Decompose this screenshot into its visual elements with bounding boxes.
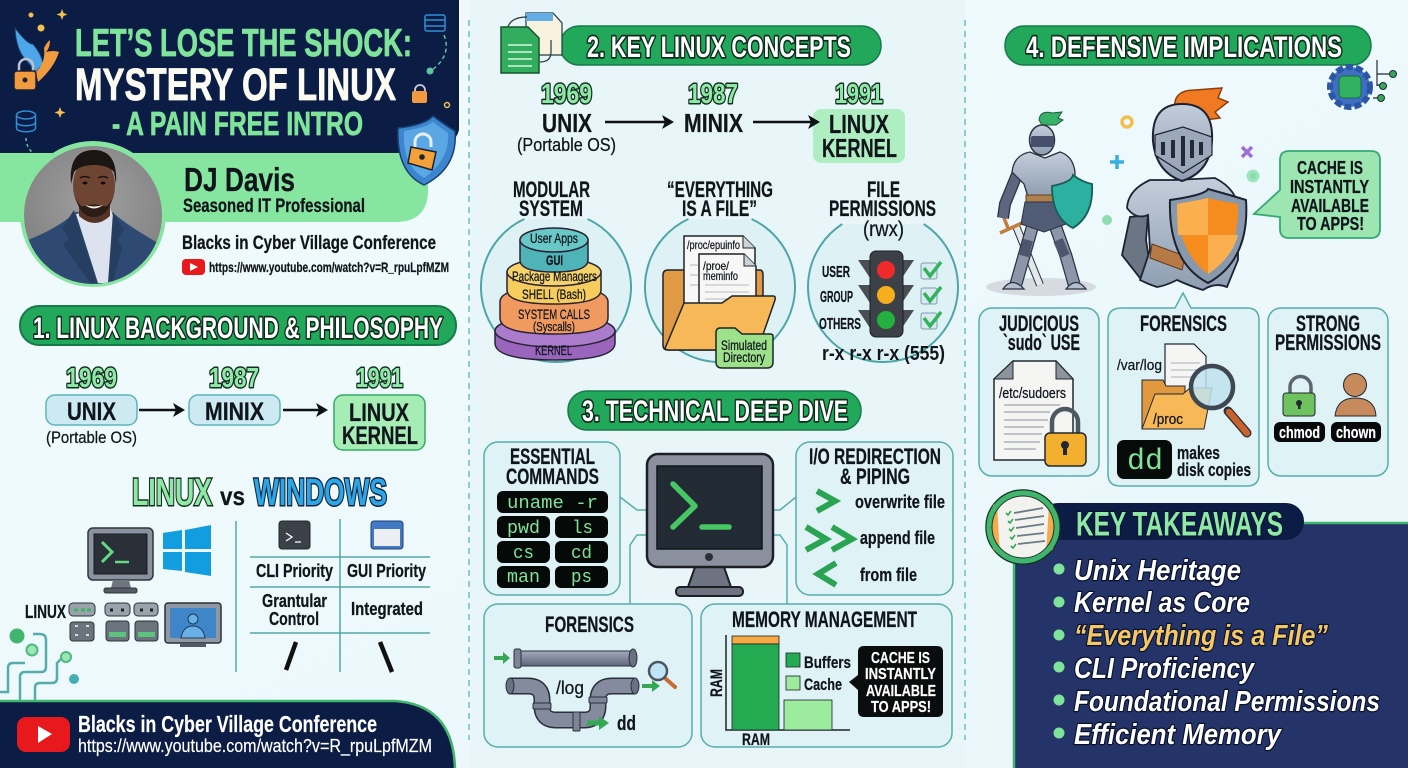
conference text and link: https://www.youtube.com/watch?v=R_rpuLpfMZM [209,259,449,275]
speaker name and role: DJ Davis [184,161,295,198]
panel: io redirection: append file [860,528,935,548]
section 2 heading [560,26,881,65]
footer banner [0,701,455,768]
stack labels: KERNEL [535,342,572,358]
concept: file permissions [808,177,958,365]
concept: file permissions: r-x r-x r-x (555) [822,343,945,365]
takeaway list [1054,555,1380,751]
stack labels: GUI [546,252,563,268]
big knight shield [1170,189,1246,283]
decorative shapes around knight [1102,117,1258,225]
timeline: section 1 [46,362,425,450]
panel: forensics [1108,293,1259,486]
concept: modular system: MODULAR [513,177,590,202]
section 3 heading: 3. TECHNICAL DEEP DIVE [582,395,848,428]
stack labels: User Apps [530,230,578,246]
callout: cache speech bubble: INSTANTLY [1290,177,1369,197]
timeline: section 1: KERNEL [342,422,418,450]
section 1 heading [20,306,456,345]
linux vs windows heading [132,472,387,514]
timeline: section 1: LINUX [349,399,409,427]
timeline: section 1: (Portable OS) [46,428,137,447]
concept: file permissions: OTHERS [819,316,861,333]
icon: documents [501,13,562,73]
concept: file permissions: FILE [867,177,900,202]
title [75,22,412,142]
panel: forensics: FORENSICS [1140,311,1227,336]
callout: cache speech bubble [1254,151,1380,238]
icon: magnifier [649,662,675,687]
icon: checklist badge [986,490,1060,564]
section 1 heading: 1. LINUX BACKGROUND & PHILOSOPHY [33,312,443,345]
icon: magnifier [1191,366,1247,433]
panel: essential commands: uname -r [507,494,598,514]
timeline: section 2: KERNEL [822,133,897,163]
concept: everything is a file: “EVERYTHING [667,177,773,202]
chart legend [786,653,851,694]
timeline: section 2 [517,78,905,163]
stack labels: Package Managers [512,268,597,284]
icon: flame and padlock [14,9,68,118]
panel: key takeaways [986,490,1408,768]
linux vs windows heading: vs [220,481,245,511]
panel: essential commands: COMMANDS [506,464,599,489]
icon: gui desktop user [165,603,221,647]
panel: essential commands: ps [571,568,592,588]
panel: judicious sudo use: `sudo` USE [1003,330,1080,355]
concept: file permissions: PERMISSIONS [829,196,936,221]
concept: everything is a file: meminfo [703,269,738,283]
panel: strong permissions: chown [1336,423,1376,442]
bar chart: ram [707,635,850,749]
takeaway list: Kernel as Core [1074,587,1250,619]
icon: yellow padlock [1045,409,1086,466]
timeline: section 1: 1991 [356,362,403,393]
callout: cache [849,646,943,717]
panel: forensics: /var/log [1117,357,1162,374]
title: MYSTERY OF LINUX [75,59,396,110]
icon: gear network [1330,60,1396,107]
panel: essential commands: pwd [507,519,540,539]
footer banner: Blacks in Cyber Village Conference [78,711,377,737]
comparison table [236,519,430,672]
concept: everything is a file: Directory [723,349,765,365]
callout: cache: AVAILABLE [866,683,936,700]
timeline: section 1: 1969 [66,362,117,393]
sword [1000,208,1040,285]
panel: strong permissions: chmod [1279,423,1320,442]
panel: forensics: dd [1127,445,1163,479]
speaker band [0,153,428,222]
stack labels [512,230,597,358]
panel: essential commands: man [507,568,540,588]
panel: essential commands: ESSENTIAL [510,444,595,469]
icon: server and circuit [412,15,450,108]
icon: gui window [371,521,403,549]
panel: essential commands: ls [572,519,593,539]
concept: file permissions: GROUP [820,289,853,306]
panel: io redirection: I/O REDIRECTION [809,444,941,469]
comparison table: GUI Priority [347,561,426,581]
panel: essential commands: cd [571,544,592,564]
callout: cache speech bubble: CACHE IS [1297,158,1363,178]
bar chart: ram: RAM [742,730,770,749]
title: LET’S LOSE THE SHOCK: [75,22,412,65]
concept: file permissions: (rwx) [863,218,904,241]
panel: forensics: makes [1177,443,1220,463]
timeline: section 1: 1987 [209,362,259,393]
callout: cache speech bubble: TO APPS! [1297,214,1364,234]
footer banner: https://www.youtube.com/watch?v=R_rpuLpfMZM [78,736,432,757]
timeline: section 2: UNIX [542,108,593,138]
illustration: small knight [986,112,1096,296]
callout: cache: TO APPS! [871,699,931,716]
knight shield [1052,175,1092,228]
comparison table: Integrated [351,599,423,619]
linux hardware icons: LINUX [25,602,66,622]
callout: cache speech bubble: AVAILABLE [1291,196,1369,216]
panel: io redirection: & PIPING [840,464,910,489]
bar chart: ram: RAM [707,669,726,697]
icon: traffic light [858,251,914,337]
icon: person [1335,374,1376,416]
linux vs windows heading: WINDOWS [254,472,387,514]
concept: everything is a file: IS A FILE” [682,196,757,221]
stack labels: (Syscalls) [533,319,575,334]
concept: modular system: SYSTEM [519,196,583,221]
panel: forensics pipes: /log [556,678,584,698]
icon: green padlock [1283,376,1315,416]
timeline: section 2: 1969 [541,78,592,109]
timeline: section 2: MINIX [684,108,744,138]
illustration: big knight [1122,88,1246,290]
linux hardware icons [25,602,158,641]
panel: memory management: MEMORY MANAGEMENT [732,607,917,632]
concept: everything is a file [645,177,795,368]
timeline: section 1: UNIX [67,398,116,426]
section 3 heading [568,391,861,430]
icon: database [16,111,36,153]
panel: judicious sudo use [979,308,1099,476]
title: - A PAIN FREE INTRO [112,105,363,142]
icon: check boxes [921,262,941,329]
panel: forensics pipes: FORENSICS [545,612,634,637]
arm [1003,172,1018,218]
panel: forensics pipes: dd [617,713,636,735]
panel: forensics: disk copies [1177,460,1251,480]
concept: modular system [481,177,631,362]
panel: io redirection: from file [860,565,917,585]
panel: essential commands: cs [513,544,534,564]
section 2 heading: 2. KEY LINUX CONCEPTS [587,31,851,64]
panel: forensics pipes [484,604,692,747]
icon: shield with lock [398,116,455,185]
comparison table: Control [269,609,319,629]
takeaway list: Unix Heritage [1074,555,1241,587]
timeline: section 2: 1991 [835,78,883,109]
takeaway list: CLI Proficiency [1074,653,1256,685]
panel: judicious sudo use: JUDICIOUS [999,311,1079,336]
stack labels: SYSTEM CALLS [518,306,590,322]
concept: file permissions: USER [822,264,850,281]
speaker name and role: Seasoned IT Professional [183,196,365,217]
icon: central terminal monitor [647,454,773,596]
conference text and link [182,233,449,275]
speaker photo [20,141,170,290]
icon: youtube [17,717,70,752]
timeline: section 2: 1987 [688,78,738,109]
concept: everything is a file: /proc/epuinfo [687,238,740,252]
layer: kernel [495,315,615,360]
timeline: section 1: MINIX [205,398,264,426]
panel: strong permissions: STRONG [1296,311,1360,336]
connectors [620,497,796,604]
layer: system calls [500,287,608,334]
panel: io redirection [796,442,953,595]
callout: cache: INSTANTLY [865,666,936,683]
conference text and link: Blacks in Cyber Village Conference [182,233,436,254]
legs [1003,228,1086,289]
concept: everything is a file: Simulated [721,337,767,353]
stack labels: SHELL (Bash) [522,286,586,302]
heading: KEY TAKEAWAYS [1076,506,1283,544]
panel: memory management [701,604,952,749]
takeaway list: “Everything is a File” [1074,620,1328,652]
panel: judicious sudo use: /etc/sudoers [999,385,1066,402]
panel: essential commands [484,442,620,595]
panel: forensics: /proc [1153,411,1183,428]
panel: io redirection: overwrite file [855,492,945,512]
chart legend: Buffers [804,653,851,672]
icon: linux terminal monitor [88,528,153,593]
circuit decoration [0,628,79,700]
comparison table: Grantular [262,591,327,611]
concept: everything is a file: /proe/ [703,259,730,273]
layer: user apps and gui [520,228,588,272]
linux vs windows heading: LINUX [132,472,212,514]
icon: terminal window [279,521,310,549]
panel: strong permissions [1268,308,1388,476]
icon: windows logo [163,525,211,576]
header banner [0,0,459,222]
timeline: section 2: (Portable OS) [517,135,616,155]
layer: shell [507,258,601,304]
callout: cache: CACHE IS [871,650,930,667]
speaker name and role [183,161,365,217]
comparison table: CLI Priority [256,561,333,581]
takeaway list: Efficient Memory [1074,719,1283,751]
chart legend: Cache [804,675,842,694]
timeline: section 2: LINUX [829,109,890,139]
